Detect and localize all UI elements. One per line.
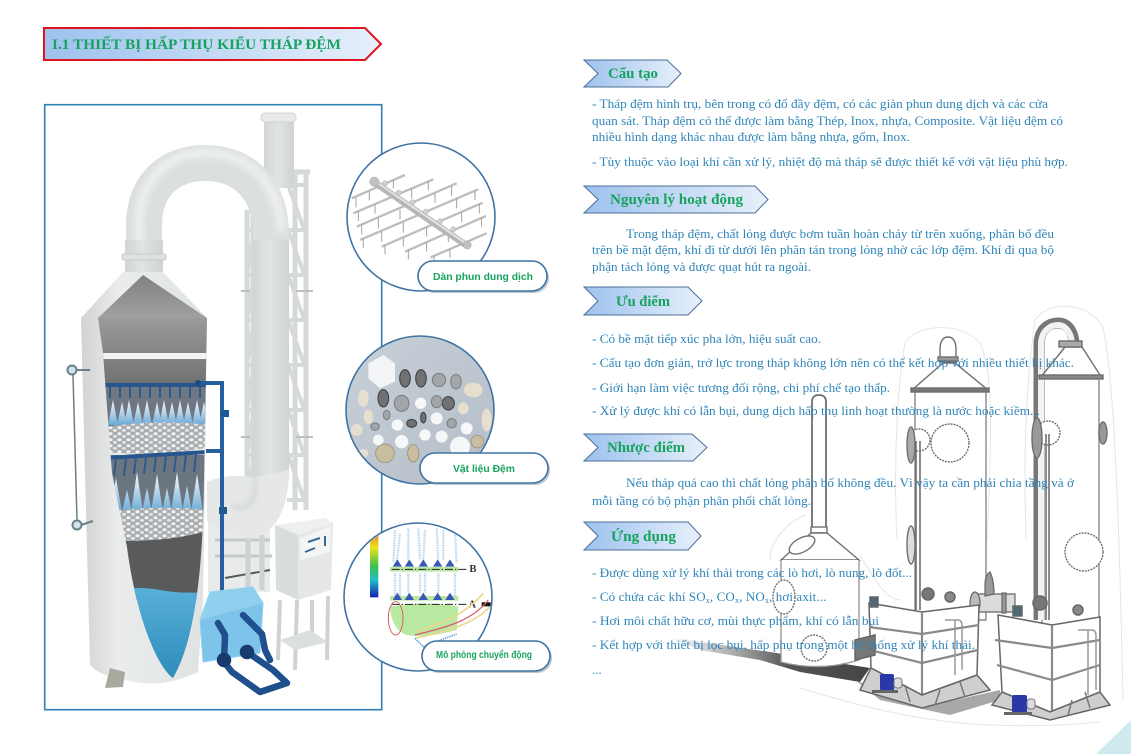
tower cutaway interior bbox=[98, 275, 207, 678]
heading: Ưu điểm bbox=[584, 287, 702, 315]
panel: absorption tower illustration bbox=[45, 105, 382, 710]
spray cones lower bbox=[110, 472, 203, 512]
text block: Ưu điểm: - Giới hạn làm việc tương đối rộng, chi phí chế tạo thấp. bbox=[592, 380, 890, 395]
spray cones upper bbox=[108, 400, 209, 425]
text block: Ưu điểm bbox=[592, 331, 1074, 418]
text block: Ưu điểm: - Có bề mặt tiếp xúc pha lớn, hiệu suất cao. bbox=[592, 331, 821, 346]
section lines bbox=[392, 569, 467, 604]
text block: Cấu tạo: - Tháp đệm hình trụ, bên trong có đổ đầy đệm, có các giàn phun dung dịch và các cửa bbox=[592, 96, 1048, 111]
text block: Ứng dụng: - Hơi môi chất hữu cơ, mùi thực phẩm, khí có lẫn bụi bbox=[592, 613, 879, 628]
sketch halo outlines bbox=[770, 306, 1123, 726]
riser pipe bbox=[253, 230, 289, 480]
panel frame bbox=[45, 105, 382, 710]
text block: Ứng dụng: , hơi axit... bbox=[769, 589, 827, 604]
label pill: flow simulation bbox=[422, 641, 552, 673]
title banner: I.1 THIẾT BỊ HẤP THỤ KIỂU THÁP ĐỆM bbox=[52, 35, 341, 53]
label pill: packing material bbox=[420, 453, 550, 485]
text block: Nhược điểm bbox=[592, 475, 1075, 508]
control cabinet bbox=[275, 518, 333, 670]
level gauge bbox=[68, 366, 93, 530]
spray nozzles bbox=[356, 180, 482, 264]
circle: flow simulation: B bbox=[469, 564, 476, 575]
text block: Cấu tạo: - Tùy thuộc vào loại khí cần xử lý, nhiệt độ mà tháp sẽ được thiết kế với vật liệu phù hợp. bbox=[592, 154, 1068, 169]
ground shadow bbox=[667, 637, 870, 682]
label pill: packing material: Vật liệu Đệm bbox=[453, 463, 515, 475]
tower foot bbox=[105, 668, 125, 688]
text block: Nguyên lý hoạt động bbox=[592, 226, 1055, 274]
text block: Ứng dụng: x bbox=[765, 596, 769, 605]
spray cones bbox=[393, 559, 455, 600]
text block: Ứng dụng: , CO bbox=[710, 589, 735, 604]
feed pipework bbox=[195, 380, 229, 592]
recirculation curves bbox=[388, 602, 403, 635]
sketch tower A bbox=[773, 395, 859, 667]
circle: packing material bbox=[346, 336, 494, 484]
text block: Ưu điểm: - Xử lý được khí có lẫn bụi, dung dịch hấp thụ linh hoạt thường là nước hoặc kiềm... bbox=[592, 403, 1040, 418]
streamlines bbox=[393, 528, 457, 597]
text block: Ứng dụng: ... bbox=[592, 662, 602, 677]
packing pieces bbox=[368, 355, 395, 388]
fan housing and outlet curve bbox=[207, 470, 289, 538]
exhaust stack bbox=[261, 113, 296, 188]
text block: Cấu tạo: quan sát. Tháp đệm có thể được làm bằng Thép, Inox, nhựa, Composite. Vật liệu đệm có bbox=[592, 113, 1063, 128]
heading: Nhược điểm bbox=[584, 434, 707, 461]
text block: Ứng dụng: - Được dùng xử lý khí thải trong các lò hơi, lò nung, lò đốt... bbox=[592, 565, 912, 580]
heading: Nhược điểm: Nhược điểm bbox=[607, 440, 685, 456]
heading: Ứng dụng: Ứng dụng bbox=[611, 528, 677, 545]
ground shadow between tanks bbox=[855, 680, 1000, 715]
text block: Nguyên lý hoạt động: phận tách lỏng và được quạt hút ra ngoài. bbox=[592, 259, 811, 274]
pump B bbox=[872, 674, 902, 693]
text block: Nguyên lý hoạt động: trên bề mặt đệm, khí đi từ dưới lên phân tán trong lỏng nhờ các lớp đệm. Khí đi qua bộ bbox=[592, 242, 1054, 257]
tower shell bbox=[81, 272, 207, 684]
label pill: flow simulation: Mô phỏng chuyển động bbox=[436, 649, 532, 661]
heading: Ứng dụng bbox=[584, 522, 701, 550]
text block: Ứng dụng bbox=[592, 565, 975, 677]
connector pipe between towers bbox=[970, 572, 1015, 614]
tower sump dark bbox=[126, 532, 202, 600]
circle: flow simulation bbox=[344, 523, 493, 671]
lower frame and fan supports bbox=[208, 520, 272, 592]
lattice support structure bbox=[241, 172, 313, 560]
heading: Cấu tạo bbox=[584, 60, 681, 87]
spray header pipes bbox=[100, 383, 210, 387]
sketch tank B bbox=[855, 588, 990, 708]
text block: Ứng dụng: , NO bbox=[739, 589, 765, 604]
label pill: spray assembly: Dàn phun dung dịch bbox=[433, 271, 533, 283]
text block: Nhược điểm: mỗi tầng có bộ phận phân phối chất lỏng. bbox=[592, 493, 811, 508]
text block: Cấu tạo: nhiều hình dạng khác nhau được làm bằng nhựa, gốm, Inox. bbox=[592, 129, 910, 144]
pump pipe loop bbox=[218, 615, 287, 692]
tower neck bbox=[122, 240, 166, 276]
water tank bbox=[200, 587, 263, 662]
sketch tower C bbox=[1032, 323, 1107, 625]
packed bed upper bbox=[105, 422, 210, 455]
heading: Nguyên lý hoạt động bbox=[584, 186, 768, 213]
circle: flow simulation: A bbox=[468, 600, 476, 611]
colour scale bbox=[370, 535, 378, 597]
text block: Ứng dụng: x bbox=[706, 596, 710, 605]
heading: Nguyên lý hoạt động: Nguyên lý hoạt động bbox=[610, 192, 743, 208]
text block: Ứng dụng: - Kết hợp với thiết bị lọc bụi, hấp phụ trong một hệ thống xử lý khí thải. bbox=[592, 637, 975, 652]
title banner bbox=[44, 28, 381, 60]
background illustration: three tower sketch bbox=[667, 306, 1123, 726]
main header pipe bbox=[373, 182, 468, 247]
pump C bbox=[1004, 695, 1035, 715]
text block: Ứng dụng: - Có chứa các khí SO bbox=[592, 589, 706, 604]
text block: Ứng dụng: x bbox=[735, 596, 739, 605]
heading: Ưu điểm: Ưu điểm bbox=[616, 294, 670, 310]
green flow zone bbox=[390, 603, 458, 636]
text block: Nhược điểm: Nếu tháp quá cao thì chất lỏng phân bố không đều. Vì vậy ta cần phải chia tầng và ở bbox=[626, 475, 1075, 490]
text block: Ưu điểm: - Cấu tạo đơn giản, trở lực trong tháp không lớn nên có thể kết hợp với nhiều thiết bị khác. bbox=[592, 355, 1074, 370]
text block: Cấu tạo bbox=[592, 96, 1068, 169]
packed bed lower bbox=[120, 508, 204, 542]
corner accent triangle bbox=[1096, 720, 1131, 754]
water bbox=[134, 588, 198, 678]
label pill: spray assembly bbox=[418, 261, 549, 293]
sketch tower B bbox=[907, 337, 989, 620]
sketch tank C bbox=[992, 596, 1110, 720]
circle: spray assembly bbox=[347, 143, 495, 291]
spray branch pipes bbox=[352, 175, 487, 257]
text block: Nguyên lý hoạt động: Trong tháp đệm, chất lỏng được bơm tuần hoàn chảy từ trên xuống, phân bố đều bbox=[626, 226, 1055, 241]
overhead duct bbox=[139, 153, 281, 265]
heading: Cấu tạo: Cấu tạo bbox=[608, 66, 658, 82]
